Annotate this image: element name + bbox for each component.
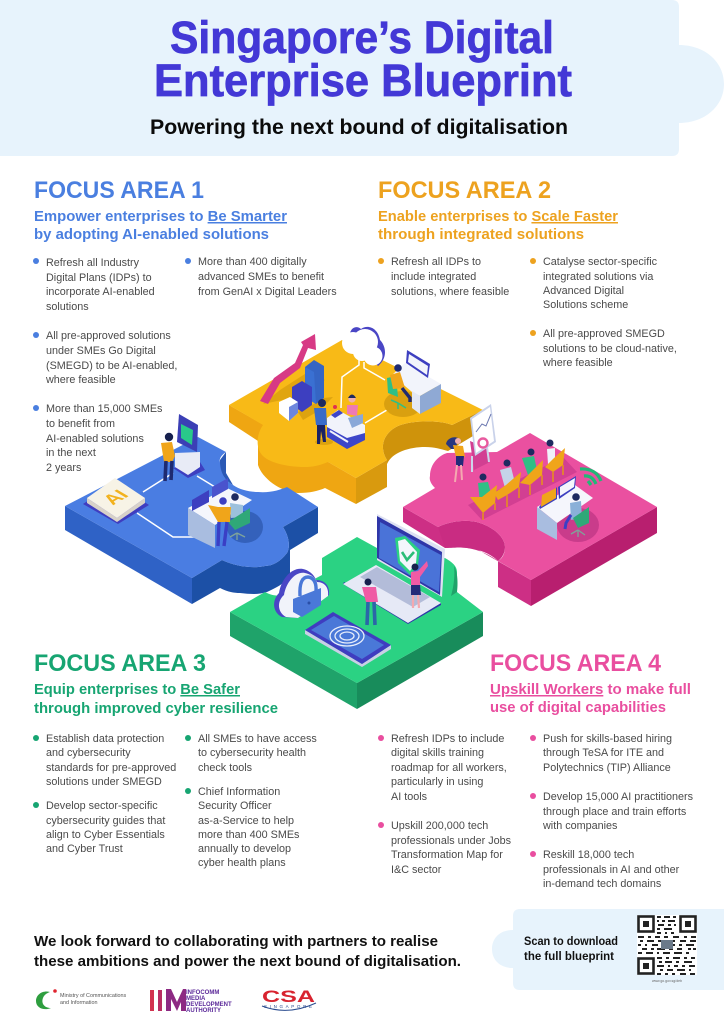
logo: CSA Singapore [262, 987, 316, 1010]
focus area 4 bullets: in-demand tech domains [543, 878, 662, 890]
focus area 4 bullets: digital skills training [391, 747, 484, 759]
focus area 1 heading: Empower enterprises to Be Smarter [34, 208, 287, 225]
icon: AI chip: AI [98, 487, 134, 508]
focus area 2 bullets: where feasible [542, 357, 613, 369]
desk with two workers [188, 478, 263, 548]
subtitle: Powering the next bound of digitalisation [150, 116, 568, 139]
QR code [637, 915, 697, 975]
focus area 4 heading: FOCUS AREA 4 [490, 650, 662, 677]
icon: rising arrow [260, 334, 325, 404]
desk worker [537, 476, 599, 542]
puzzle piece: blue focus area 1 [65, 414, 318, 604]
logo: CSA Singapore: CSA [262, 987, 315, 1006]
focus area 2 heading [378, 177, 618, 243]
focus area 3 bullets: cybersecurity guides that [46, 815, 165, 827]
focus area 1 bullets: advanced SMEs to benefit [198, 271, 324, 283]
logo: Infocomm Media Development Authority: INFOCOMM [186, 990, 219, 996]
callout: QR download [492, 909, 724, 990]
focus area 4 bullets: with companies [542, 820, 618, 832]
focus area 3 bullets: and cybersecurity [46, 747, 131, 759]
puzzle piece: green focus area 3 [230, 514, 483, 709]
focus area 1 bullets: where feasible [45, 374, 116, 386]
focus area 3 bullets: and Cyber Trust [46, 843, 123, 855]
presenter [446, 437, 465, 482]
person in blue standing [314, 399, 333, 445]
focus area 1 bullets: solutions [46, 301, 89, 313]
focus area 1 bullets: under SMEs Go Digital [46, 345, 156, 357]
icon: cloud [342, 327, 385, 366]
closing statement: We look forward to collaborating with partners to realise [34, 933, 438, 950]
focus area 3 bullets: check tools [198, 762, 253, 774]
focus area 2 bullets: Catalyse sector-specific [543, 256, 657, 268]
focus area 3 bullets: more than 400 SMEs [198, 829, 300, 841]
focus area 4 bullets: through place and train efforts [543, 806, 687, 818]
logo: Ministry of Communications and Information [36, 989, 127, 1009]
focus area 3 heading: FOCUS AREA 3 [34, 650, 206, 677]
focus area 1 bullets: AI-enabled solutions [46, 433, 144, 445]
focus area 3 bullets: align to Cyber Essentials [46, 829, 165, 841]
focus area 2 bullets: solutions to be cloud-native, [543, 343, 677, 355]
header banner [0, 0, 724, 156]
desk worker with monitor [384, 350, 441, 417]
focus area 3 bullets: solutions under SMEGD [46, 776, 162, 788]
icon: bar chart [279, 360, 333, 421]
focus area 3 bullets: Chief Information [198, 786, 280, 798]
focus area 1 bullets: in the next [46, 447, 96, 459]
focus area 1 bullets: from GenAI x Digital Leaders [198, 286, 337, 298]
title: Singapore’s Digital [170, 12, 554, 63]
focus area 4 bullets: Reskill 18,000 tech [543, 849, 634, 861]
puzzle piece: yellow focus area 2 [229, 327, 483, 504]
focus area 3 bullets: standards for pre-approved [46, 762, 176, 774]
title: Enterprise Blueprint [154, 55, 572, 106]
focus area 1 bullets: 2 years [46, 462, 82, 474]
focus area 3 bullets: cyber health plans [198, 857, 286, 869]
focus area 2 heading: through integrated solutions [378, 226, 584, 243]
closing statement: these ambitions and power the next bound of digitalisation. [34, 953, 461, 970]
focus area 2 bullets: Refresh all IDPs to [391, 256, 481, 268]
logo: Infocomm Media Development Authority: MEDIA [186, 996, 206, 1002]
focus area 2 heading: FOCUS AREA 2 [378, 177, 551, 204]
focus area 4 bullets: roadmap for all workers, [391, 762, 507, 774]
focus area 3 heading: Equip enterprises to Be Safer [34, 681, 240, 698]
focus area 3 heading [34, 650, 278, 717]
icon: cloud lock [274, 569, 329, 618]
focus area 4 bullets: professionals under Jobs [391, 835, 512, 847]
logo: CSA Singapore: SINGAPORE [264, 1004, 312, 1009]
focus area 1 bullets: More than 15,000 SMEs [46, 403, 162, 415]
focus area 4 bullets [378, 733, 694, 890]
logo: Ministry of Communications and Information: and Information [60, 1000, 97, 1006]
focus area 1 bullets [33, 256, 337, 474]
focus area 3 bullets: to cybersecurity health [198, 747, 306, 759]
focus area 3 bullets: Establish data protection [46, 733, 164, 745]
circuit lines [137, 473, 215, 537]
title [154, 12, 572, 106]
focus area 1 heading: FOCUS AREA 1 [34, 177, 204, 204]
presentation board [470, 404, 496, 472]
icon: phone with fingerprint [305, 612, 391, 667]
focus area 1 bullets: All pre-approved solutions [46, 330, 171, 342]
focus area 4 bullets: professionals in AI and other [543, 864, 680, 876]
icon: laptop with shield [343, 514, 445, 624]
focus area 2 bullets: integrated solutions via [543, 271, 653, 283]
focus area 1 heading [34, 177, 287, 243]
focus area 3 heading: through improved cyber resilience [34, 700, 278, 717]
circuit lines [341, 360, 392, 423]
focus area 4 bullets: Develop 15,000 AI practitioners [543, 791, 693, 803]
focus area 4 bullets: particularly in using [391, 776, 483, 788]
focus area 1 bullets: More than 400 digitally [198, 256, 307, 268]
focus area 1 bullets: (SMEGD) to be AI-enabled, [46, 360, 177, 372]
focus area 3 bullets: All SMEs to have access [198, 733, 317, 745]
focus area 4 heading: Upskill Workers to make full [490, 681, 691, 698]
logo: Infocomm Media Development Authority [150, 989, 232, 1014]
focus area 3 bullets [33, 733, 317, 869]
reception desk with staff [327, 394, 365, 449]
focus area 3 bullets: annually to develop [198, 843, 291, 855]
focus area 4 bullets: through TeSA for ITE and [543, 747, 664, 759]
focus area 2 bullets: include integrated [391, 271, 476, 283]
logo: Ministry of Communications and Information: Ministry of Communications [60, 993, 127, 999]
focus area 3 bullets: Security Officer [198, 800, 272, 812]
icon: wifi [580, 469, 601, 485]
focus area 4 bullets: Refresh IDPs to include [391, 733, 504, 745]
kiosk with person [161, 414, 205, 481]
closing statement [34, 933, 461, 970]
focus area 1 heading: by adopting AI-enabled solutions [34, 226, 269, 243]
focus area 1 bullets: Refresh all Industry [46, 257, 139, 269]
puzzle piece: pink focus area 4 [403, 404, 657, 606]
two people [362, 561, 428, 625]
focus area 1 bullets: incorporate AI-enabled [46, 286, 155, 298]
audience in chairs [468, 440, 577, 520]
focus area 1 bullets: to benefit from [46, 418, 115, 430]
focus area 2 bullets [378, 256, 677, 369]
focus area 2 bullets: solutions, where feasible [391, 286, 509, 298]
focus area 4 bullets: Polytechnics (TIP) Alliance [543, 762, 671, 774]
logo: Infocomm Media Development Authority: DEVELOPMENT [186, 1002, 232, 1008]
focus area 4 bullets: AI tools [391, 791, 428, 803]
focus area 4 heading: use of digital capabilities [490, 699, 666, 716]
focus area 2 heading: Enable enterprises to Scale Faster [378, 208, 618, 225]
focus area 2 bullets: All pre-approved SMEGD [543, 328, 665, 340]
callout: QR download: www.go.gov.sg/deb [652, 979, 682, 983]
focus area 2 bullets: Advanced Digital [543, 285, 624, 297]
icon: AI chip [83, 478, 149, 524]
focus area 4 bullets: Upskill 200,000 tech [391, 820, 488, 832]
focus area 4 bullets: Transformation Map for [391, 849, 503, 861]
callout: QR download: Scan to download [524, 936, 618, 948]
callout: QR download: the full blueprint [524, 951, 614, 963]
logo: Infocomm Media Development Authority: AUTHORITY [186, 1008, 221, 1014]
focus area 4 heading [490, 650, 691, 716]
focus area 4 bullets: I&C sector [391, 864, 442, 876]
focus area 4 bullets: Push for skills-based hiring [543, 733, 672, 745]
focus area 3 bullets: Develop sector-specific [46, 800, 158, 812]
focus area 3 bullets: as-a-Service to help [198, 815, 294, 827]
focus area 1 bullets: Digital Plans (IDPs) to [46, 272, 152, 284]
focus area 2 bullets: Solutions scheme [543, 299, 628, 311]
